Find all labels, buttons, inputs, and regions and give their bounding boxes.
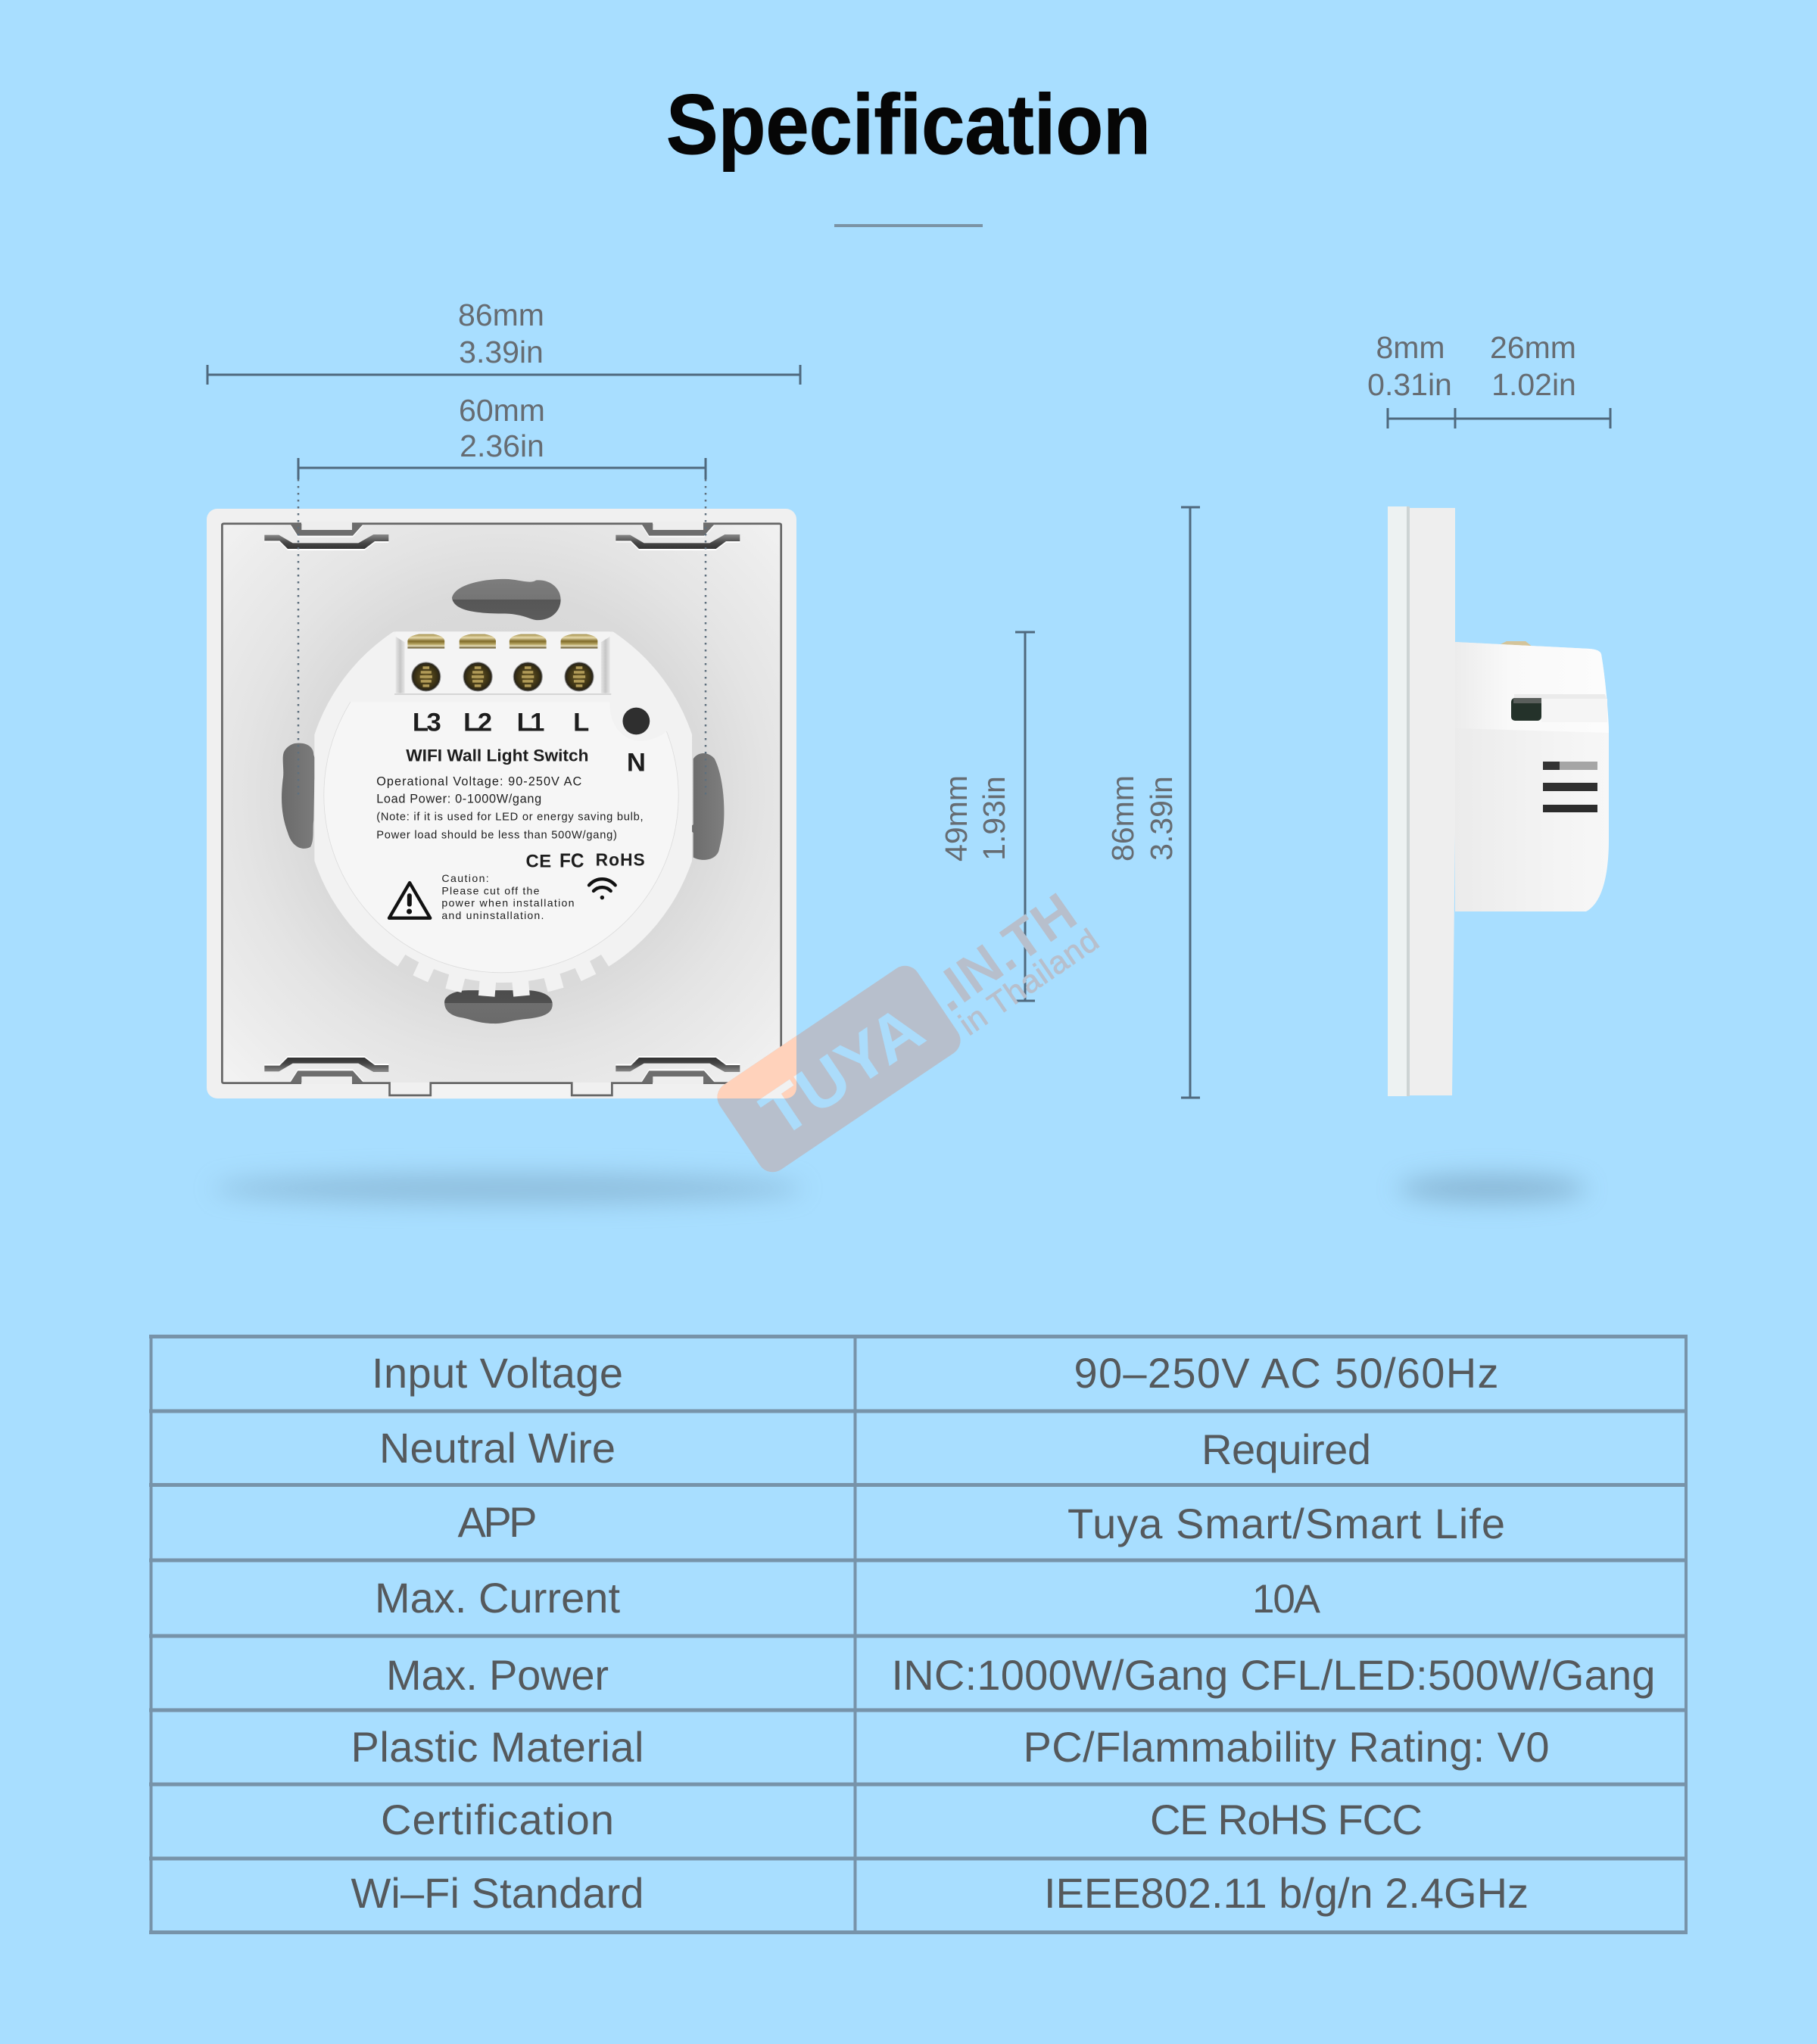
vent slits [1543,762,1597,812]
caution text: power when installation [441,897,574,909]
neutral terminal hole [622,708,650,734]
certification marks: RoHS [596,849,645,869]
front dimension: 86mm width: 86mm [458,298,544,332]
label rating text: Load Power: 0-1000W/gang [376,792,541,805]
terminal labels: L2 [463,709,492,737]
side dimension: 8mm and 26mm depth: 1.02in [1491,367,1576,402]
row: max current [375,1574,1321,1622]
dimension: 49mm mounting height [939,632,1035,1001]
row: wi-fi standard: Wi–Fi Standard [351,1869,644,1917]
side dimension: 8mm and 26mm depth: 0.31in [1367,367,1452,402]
row: plastic material: PC/Flammability Rating: V0 [1024,1723,1549,1771]
terminal labels: L [573,709,589,737]
watermark tagline: in Thailand [952,922,1105,1042]
row: certification: Certification [381,1796,614,1843]
recessed inner area [222,524,781,1083]
front dimension: 60mm width [298,393,706,479]
plate seam [1407,506,1410,1096]
rear plate [1410,508,1455,1095]
floor shadow: side view [1398,1175,1587,1202]
caution text: Caution: [441,872,489,884]
label heading: WIFI Wall Light Switch [406,746,588,765]
dimension: 49mm mounting height: 49mm [939,775,974,862]
caution text [441,872,574,921]
icon: wifi [589,879,616,899]
row: input voltage: 90–250V AC 50/60Hz [1074,1349,1499,1397]
dimension: 86mm overall height: 86mm [1105,775,1140,862]
front dimension: 86mm width: 3.39in [459,335,544,369]
label rating text [376,775,644,842]
dotted guide lines [298,479,706,799]
clip: top right [616,524,740,550]
clip: top left [264,524,388,550]
row: app: Tuya Smart/Smart Life [1067,1500,1505,1547]
mounting hole: right [688,753,724,860]
front dimension: 86mm width [207,298,800,385]
row: input voltage [372,1349,1499,1397]
row: max current: Max. Current [375,1574,620,1622]
terminal brass peek [1499,641,1533,647]
row: input voltage: Input Voltage [372,1349,623,1397]
row: neutral wire: Neutral Wire [379,1424,616,1472]
housing ridge shadow [1514,694,1607,699]
row: max power: Max. Power [386,1651,609,1699]
terminal block [394,631,611,695]
row: max power: INC:1000W/Gang CFL/LED:500W/Gang [892,1651,1655,1699]
side slot [1511,698,1541,721]
certification marks: CE [526,851,551,871]
dimension: 49mm mounting height: 1.93in [977,776,1011,861]
inner frame and bottom tab [222,524,781,1098]
row: plastic material: Plastic Material [351,1723,644,1771]
plate [207,509,796,1098]
frame gaps at the clips [301,522,703,1084]
row: plastic material [351,1723,1549,1771]
label sticker [324,703,678,974]
module drawing [282,579,724,1024]
title: Specification [666,77,1151,172]
terminal labels: N [627,749,646,777]
watermark domain: .IN.TH [921,882,1087,1024]
mounting hole: bottom [444,990,553,1024]
specification table [149,1335,1688,1934]
housing upper part [1455,642,1609,733]
table grid [149,1335,1688,1934]
housing light channel [1541,699,1607,722]
icon: warning triangle [389,883,430,918]
row: max current: 10A [1252,1577,1321,1622]
terminal labels: L3 [413,709,441,737]
clip: bottom left [264,1056,388,1083]
certification marks: FC [559,849,584,871]
module teeth [413,958,596,997]
watermark badge over plate [718,1036,796,1098]
module body [314,631,692,997]
side dimension: 8mm and 26mm depth [1367,330,1610,428]
brass contacts [407,634,597,649]
panel: rear view of the switch [207,479,796,1098]
terminal labels: L1 [517,709,544,737]
mounting hole: left [282,743,319,849]
row: max power [386,1651,1655,1699]
label rating text: (Note: if it is used for LED or energy saving bulb, [376,812,644,824]
panel: side view of the switch [1388,506,1609,1096]
row: certification: CE RoHS FCC [1150,1796,1423,1843]
watermark [712,882,1105,1178]
side dimension: 8mm and 26mm depth: 26mm [1490,330,1576,365]
front plate [1388,506,1407,1096]
row: neutral wire [379,1424,1371,1473]
floor shadow: front view [213,1173,803,1204]
mounting hole: top [452,579,561,620]
front dimension: 60mm width: 2.36in [460,428,544,463]
module housing [1455,642,1609,911]
row: certification [381,1796,1423,1843]
label rating text: Power load should be less than 500W/gang) [376,830,617,842]
watermark brand: TUYA [749,991,937,1151]
side dimension: 8mm and 26mm depth: 8mm [1376,330,1445,365]
row: wi-fi standard: IEEE802.11 b/g/n 2.4GHz [1044,1869,1529,1917]
terminal labels [413,709,646,777]
row: neutral wire: Required [1201,1426,1371,1473]
certification marks [526,849,645,871]
watermark brand over plate: TUYA [749,991,937,1151]
row: wi-fi standard [351,1869,1529,1917]
label rating text: Operational Voltage: 90-250V AC [376,775,581,789]
clip: bottom right [616,1056,740,1083]
row: app [457,1498,1505,1547]
title divider [834,224,983,227]
row: app: APP [457,1498,538,1546]
caution text: Please cut off the [441,884,540,896]
terminal screws [412,662,594,691]
watermark badge [712,960,966,1178]
dimension: 86mm overall height [1105,507,1200,1098]
dimension: 86mm overall height: 3.39in [1144,776,1179,861]
caution text: and uninstallation. [441,909,544,921]
front dimension: 60mm width: 60mm [459,393,545,428]
